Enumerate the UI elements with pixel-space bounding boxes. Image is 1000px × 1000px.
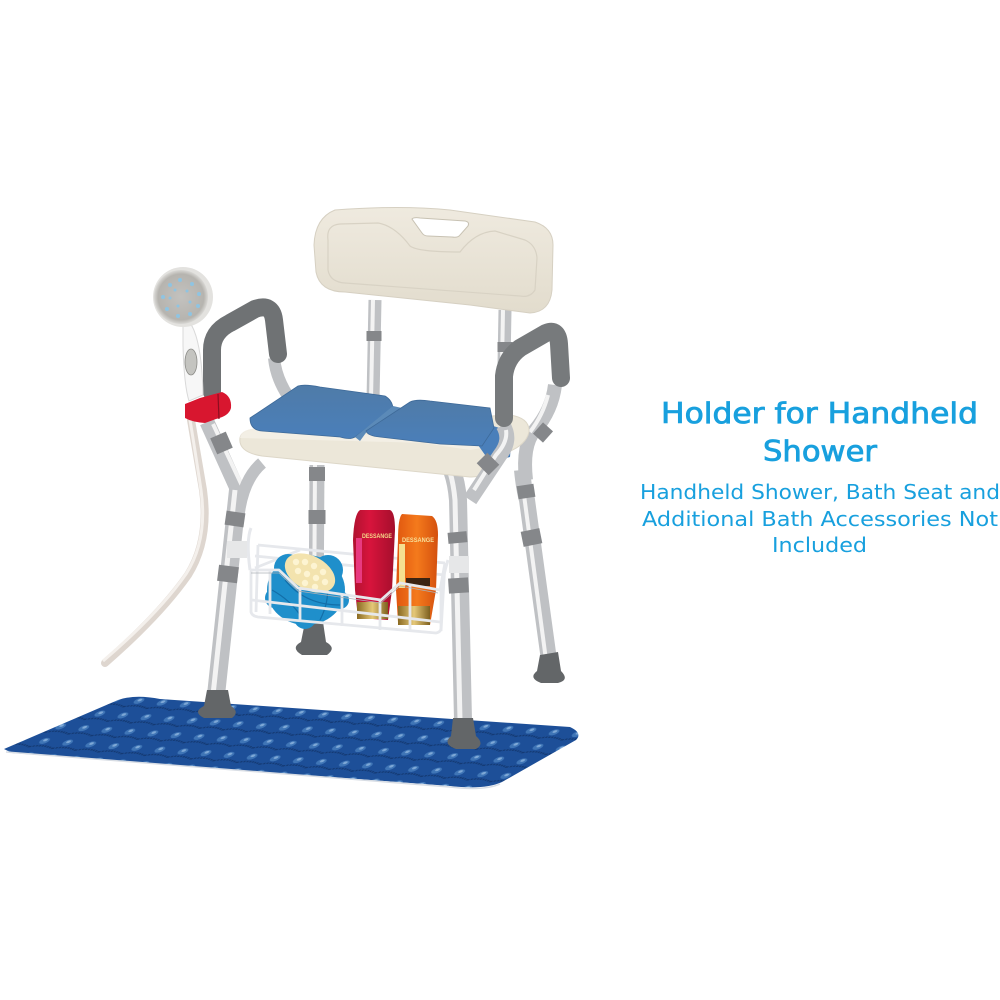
seat cushions (250, 385, 512, 462)
red bottle: DESSANGE (362, 533, 393, 540)
backrest (314, 208, 553, 313)
left armrest (207, 307, 288, 495)
basket front wires (251, 563, 445, 600)
hand shower holder (185, 392, 231, 423)
soap basket with loofah and bottles (227, 510, 469, 633)
hand shower (153, 267, 213, 401)
heading: Holder for Handheld (661, 397, 978, 430)
bath mat (4, 697, 578, 788)
basket back wires (255, 545, 445, 631)
heading: Shower (763, 435, 877, 468)
blue loofah (265, 554, 349, 629)
right armrest (470, 332, 561, 500)
orange bottle (396, 514, 438, 625)
natural sponge (278, 545, 342, 601)
seat (240, 415, 529, 477)
chair back posts (371, 300, 505, 400)
description text: Additional Bath Accessories Not (642, 507, 998, 531)
red bottle (353, 510, 395, 620)
orange bottle: DESSANGE (402, 537, 435, 544)
chair back legs (296, 465, 565, 683)
heading (661, 397, 978, 468)
description text: Included (772, 533, 867, 557)
chair front frame and legs (198, 385, 555, 749)
description text (640, 480, 1000, 557)
hand shower hose (103, 420, 205, 663)
description text: Handheld Shower, Bath Seat and (640, 480, 1000, 504)
